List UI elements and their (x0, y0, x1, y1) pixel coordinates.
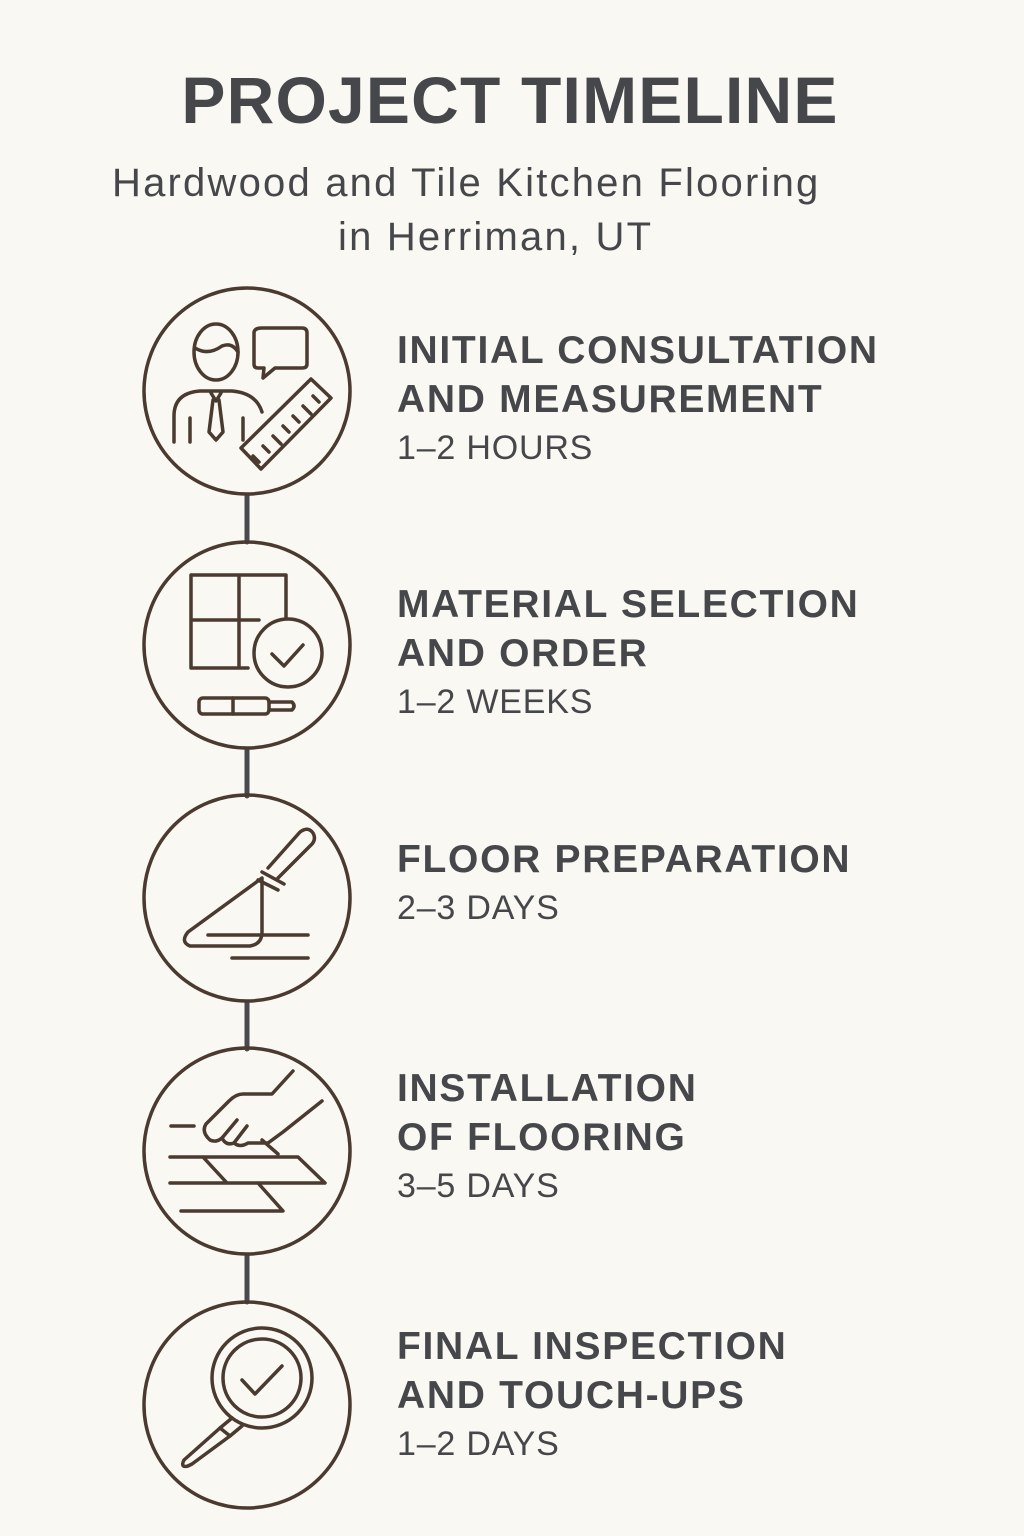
icon: floor preparation (144, 795, 350, 1001)
step 5 text: AND TOUCH-UPS (397, 1374, 746, 1417)
step 3 text (397, 838, 851, 927)
step 5 text (397, 1325, 788, 1463)
step 3 text: FLOOR PREPARATION (397, 838, 851, 881)
step 1 text: AND MEASUREMENT (397, 378, 823, 421)
icon: installation (144, 1048, 350, 1254)
subtitle (112, 161, 820, 259)
step 2 text: 1–2 WEEKS (397, 683, 593, 721)
step 4 text: 3–5 DAYS (397, 1167, 560, 1205)
step 1 text: INITIAL CONSULTATION (397, 329, 879, 372)
icon: material selection (144, 542, 350, 748)
step 4 text: INSTALLATION (397, 1067, 698, 1110)
step 1 text: 1–2 HOURS (397, 429, 593, 467)
icon: inspection (144, 1302, 350, 1508)
icon: consultation (144, 288, 350, 494)
subtitle: Hardwood and Tile Kitchen Flooring (112, 161, 820, 205)
subtitle: in Herriman, UT (338, 215, 653, 259)
step 2 text: AND ORDER (397, 632, 648, 675)
step 5 text: 1–2 DAYS (397, 1425, 560, 1463)
step 3 text: 2–3 DAYS (397, 889, 560, 927)
title: PROJECT TIMELINE (181, 63, 839, 137)
step 5 text: FINAL INSPECTION (397, 1325, 788, 1368)
step 4 text (397, 1067, 698, 1205)
step 2 text: MATERIAL SELECTION (397, 583, 860, 626)
step 1 text (397, 329, 879, 467)
step 4 text: OF FLOORING (397, 1116, 687, 1159)
step 2 text (397, 583, 860, 721)
